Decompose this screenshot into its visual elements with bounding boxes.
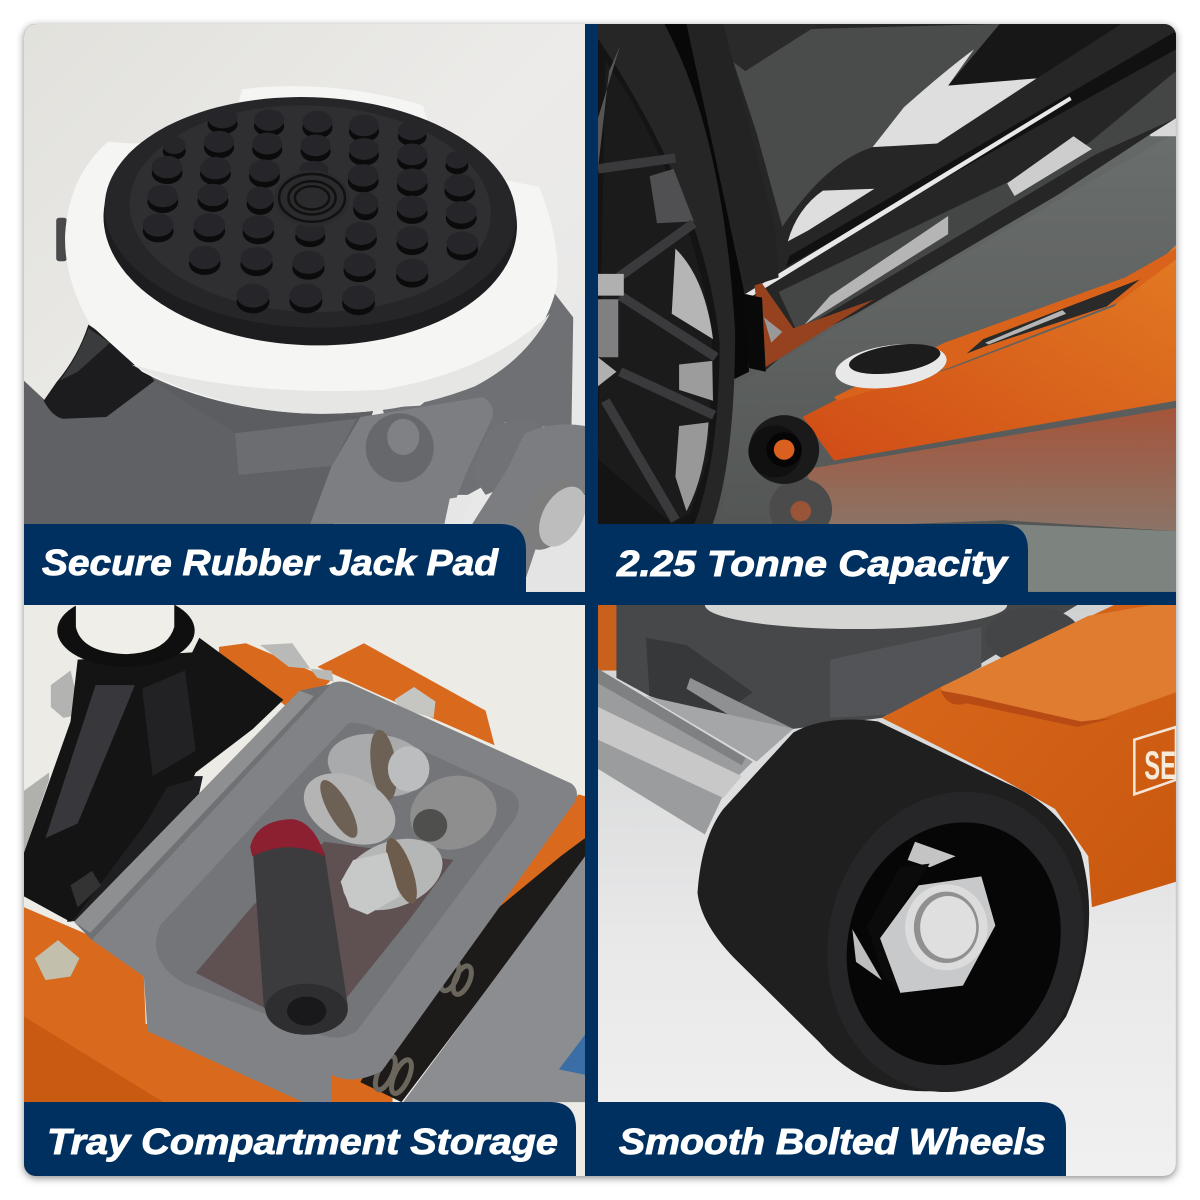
panel: rubber jack pad bbox=[24, 24, 596, 592]
dividers bbox=[585, 24, 598, 1176]
car body bbox=[664, 24, 1176, 379]
label: capacity: 2.25 Tonne Capacity bbox=[616, 543, 1009, 584]
panel: tray storage bbox=[24, 594, 585, 1176]
wheel bbox=[598, 24, 735, 526]
axle bolt bbox=[852, 842, 995, 993]
white saddle ring bbox=[56, 86, 558, 414]
socket bbox=[250, 819, 348, 1035]
black lift arm bbox=[24, 594, 283, 922]
panel: capacity photo bbox=[598, 24, 1176, 592]
wheel nuts bbox=[304, 730, 496, 915]
floor and reflection bbox=[770, 118, 1176, 592]
orange chassis bbox=[24, 643, 585, 1176]
rubber pad bbox=[99, 90, 521, 353]
orange jack bbox=[748, 245, 1176, 484]
grey jack body bbox=[24, 292, 596, 592]
label: capacity bbox=[598, 524, 1028, 592]
bolts bbox=[24, 643, 435, 980]
jack frame bbox=[598, 605, 1077, 729]
right plate and springs bbox=[360, 838, 585, 1102]
label: tray compartment storage bbox=[24, 1102, 576, 1176]
black roller wheel bbox=[698, 720, 1090, 1092]
label: smooth bolted wheels bbox=[598, 1102, 1066, 1176]
chrome rod bbox=[74, 683, 335, 940]
orange frame: SE bbox=[1144, 743, 1176, 788]
label: smooth bolted wheels: Smooth Bolted Wheels bbox=[619, 1121, 1046, 1162]
orange frame bbox=[882, 605, 1176, 907]
panel: wheels bbox=[598, 581, 1176, 1176]
label: secure rubber jack pad: Secure Rubber Jack Pad bbox=[42, 542, 499, 583]
grey tray bbox=[92, 681, 577, 1102]
label: tray compartment storage: Tray Compartment Storage bbox=[47, 1121, 558, 1162]
chrome axle bbox=[598, 669, 793, 834]
label: secure rubber jack pad bbox=[24, 524, 526, 592]
